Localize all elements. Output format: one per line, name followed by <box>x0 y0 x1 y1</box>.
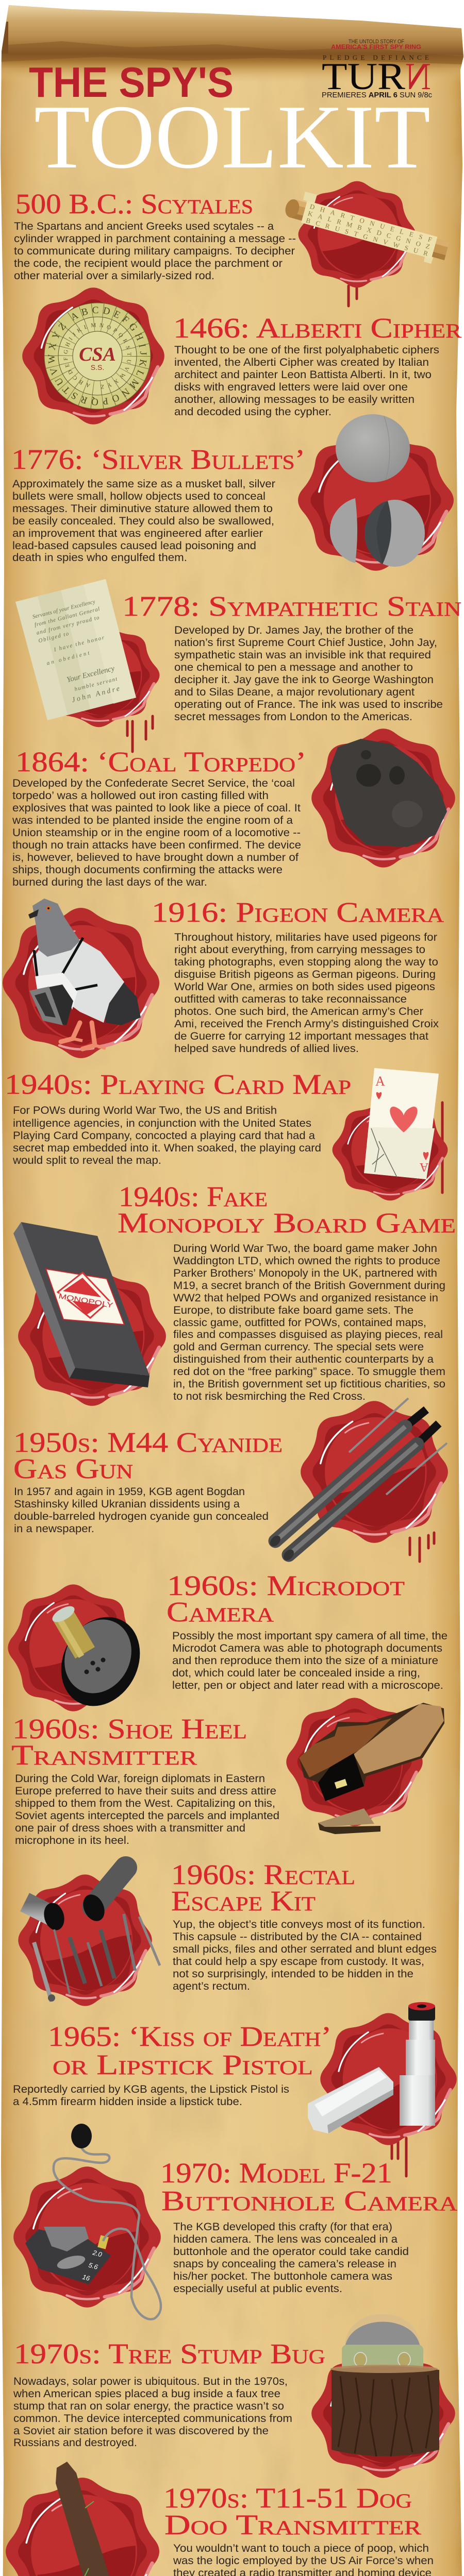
icon: wax seal with scytale rod: BCRUSTGNVWSUR <box>305 216 429 258</box>
text block: Buttonhole Camera description: especially useful at public events. <box>173 2283 342 2295</box>
text block: Tree Stump Bug description <box>13 2376 292 2449</box>
text block: Buttonhole Camera description: his/her pocket. The buttonhole camera was <box>173 2270 392 2282</box>
heading: 500 B.C. Scytales: 500 B.C.: Scytales <box>15 188 253 219</box>
text block: Pigeon Camera description: taking photographs, even stopping along the way to <box>174 956 438 968</box>
text block: Pigeon Camera description: disguise British pigeons as German pigeons. During <box>174 969 436 980</box>
text block: Rectal Escape Kit description: This capsule -- distributed by the CIA -- contained <box>173 1931 422 1943</box>
heading: 1960s Microdot Camera <box>167 1570 405 1628</box>
heading: 1970s T11-51 Dog Doo Transmitter: 1970s: T11-51 Dog <box>163 2482 412 2514</box>
text block: Buttonhole Camera description: hidden camera. The lens was concealed in a <box>173 2233 397 2245</box>
text block: Monopoly description: Waddington LTD, which owned the rights to produce <box>173 1255 440 1267</box>
icon: wax seal with scytale rod: DHARTONUELESF <box>309 202 433 244</box>
text block: Monopoly description: M19, a secret branch of the British Government during <box>173 1280 445 1292</box>
section: 1950s M44 Cyanide Gas Gun <box>13 1398 448 1562</box>
text block: Monopoly description: files and compasses disguised as playing pieces, real <box>173 1329 443 1341</box>
text block: Playing Card Map description: Playing Card Company, concocted a playing card that had a <box>13 1130 315 1142</box>
text block: Pigeon Camera description: photos. One such bird, the American army’s Cher <box>174 1006 423 1018</box>
text block: Sympathetic Stain description: Developed by Dr. James Jay, the brother of the <box>174 624 413 636</box>
text block: Pigeon Camera description: de Guerre for carrying 12 important messages that <box>174 1030 428 1042</box>
icon: wax seal with Monopoly box: MONOPOLY <box>58 1292 114 1310</box>
text block: Sympathetic Stain description: decipher it. Jay gave the ink to George Washington <box>174 674 434 686</box>
text block: Microdot description: Microdot Camera was able to photograph documents <box>172 1642 442 1654</box>
text block: Shoe Heel description: shipped to them from the West. Capitalizing on this, <box>15 1798 275 1809</box>
icon: wax seal with lipstick pistol <box>308 2002 457 2176</box>
icon: wax seal with folded letter <box>15 579 160 752</box>
heading: 1960s Shoe Heel Transmitter <box>11 1713 247 1771</box>
text block: Scytales description: The Spartans and ancient Greeks used scytales -- a <box>14 221 274 232</box>
text block: Rectal Escape Kit description: that could help a spy escape from custody. It was, <box>173 1956 424 1968</box>
text block: Pigeon Camera description: Ami, received the French Army’s distinguished Croix <box>174 1018 439 1030</box>
icon: wax seal with folded letter: Obliged to <box>38 631 70 644</box>
section: 1970s T11-51 Dog Doo Transmitter <box>6 2462 434 2576</box>
icon: wax seal with folded letter: an obedient <box>46 650 91 667</box>
section: 1965 Kiss of Death or Lipstick Pistol <box>13 2002 457 2176</box>
icon: wax seal with cipher disk: S.S. <box>91 363 104 371</box>
icon: wax seal with camera button <box>8 1584 155 1720</box>
icon: wax seal with coal lump <box>311 728 455 868</box>
icon: wax seal with Monopoly box <box>13 1222 166 1406</box>
text block: Sympathetic Stain description: secret messages from London to the Americas. <box>174 711 412 723</box>
text block: Monopoly description: Europe, to distribute fake board game sets. The <box>173 1304 413 1316</box>
text block: M44 description: double-barreled hydrogen cyanide gun concealed <box>14 1511 269 1522</box>
text block: Dog Doo description: You wouldn’t want to touch a piece of poop, which <box>173 2543 429 2554</box>
icon: wax seal with folded letter: and from very proud to <box>36 615 100 636</box>
text block: Coal Torpedo description: torpedo’ was a hollowed out iron casting filled with <box>12 790 269 802</box>
text block: Sympathetic Stain description: nation’s first Supreme Court Chief Justice, John Jay, <box>174 637 437 649</box>
text block: Alberti description: disks with engraved letters were laid over one <box>174 381 408 393</box>
heading: 1965 Kiss of Death: or Lipstick Pistol <box>53 2049 313 2080</box>
heading: 1950s M44 Cyanide Gas Gun: Gas Gun <box>13 1453 133 1484</box>
text block: Sympathetic Stain description: sympathetic stain was an invisible ink that required <box>174 649 431 661</box>
section: 1940s Fake Monopoly Board Game <box>13 1181 456 1406</box>
text block: Playing Card Map description: secret map embedded into it. When soaked, the playing card <box>13 1142 321 1154</box>
heading: 1776 Silver Bullets: 1776: ‘Silver Bullets’ <box>11 444 305 475</box>
text block: Playing Card Map description: For POWs during World War Two, the US and British <box>13 1105 277 1116</box>
section: 1940s Playing Card Map <box>5 1068 448 1200</box>
text block: Shoe Heel description: During the Cold War, foreign diplomats in Eastern <box>15 1773 265 1785</box>
text block: Buttonhole Camera description: snaps by concealing the camera’s release in <box>173 2258 396 2270</box>
icon: wax seal with buttonhole camera: 2.0 <box>91 2248 103 2259</box>
text block: Pigeon Camera description: helped save hundreds of allied lives. <box>174 1043 359 1055</box>
icon: wax seal with playing card: A <box>419 1160 428 1174</box>
text block: Shoe Heel description: microphone in its heel. <box>15 1835 129 1846</box>
heading: 1960s Shoe Heel Transmitter: 1960s: Shoe Heel <box>12 1713 247 1744</box>
text block: Coal Torpedo description: Developed by the Confederate Secret Service, the ‘coal <box>12 777 295 789</box>
section: 1916 Pigeon Camera <box>3 896 444 1058</box>
text block: M44 description: Stashinsky killed Ukranian dissidents using a <box>14 1498 240 1510</box>
text block: Pigeon Camera description <box>174 931 439 1055</box>
text block: Rectal Escape Kit description: agent’s rectum. <box>173 1980 250 1992</box>
text block: Alberti description: another, allowing messages to be easily written <box>174 394 415 405</box>
logo: Turn show promo: PREMIERES APRIL 6 SUN 9/8c <box>322 91 432 99</box>
text block: Playing Card Map description <box>12 1105 321 1166</box>
section: 1970s Tree Stump Bug <box>13 2314 455 2478</box>
heading: 1965 Kiss of Death <box>48 2021 332 2080</box>
text block: Playing Card Map description: would split to reveal the map. <box>12 1155 161 1166</box>
text block: Dog Doo description <box>173 2543 434 2576</box>
heading: 1960s Microdot Camera: Camera <box>167 1596 274 1628</box>
text block: Alberti description: invented, the Alberti Cipher was created by Italian <box>174 357 429 368</box>
heading: 1970s Tree Stump Bug: 1970s: Tree Stump Bug <box>14 2338 325 2369</box>
icon: wax seal with dog doo transmitter <box>6 2462 159 2576</box>
heading: 1970 Model F-21 Buttonhole Camera: Buttonhole Camera <box>161 2185 457 2216</box>
icon: wax seal with folded letter: from the Gallant General <box>34 606 101 628</box>
text block: M44 description: In 1957 and again in 1959, KGB agent Bogdan <box>14 1486 245 1498</box>
logo: Turn show promo: THE UNTOLD STORY OF <box>349 39 404 45</box>
text block: Silver Bullets description: death in spies who engulfed them. <box>12 552 187 564</box>
text block: Coal Torpedo description: ships, though documents confirming the attacks were <box>12 864 283 876</box>
text block: Silver Bullets description: messages. Their diminutive stature allowed them to <box>12 503 273 515</box>
text block: Pigeon Camera description: World War One, armies on both sides used pigeons <box>174 981 435 993</box>
icon: wax seal with playing card: A <box>375 1074 385 1089</box>
icon: wax seal with playing card <box>333 1068 448 1200</box>
section: 1960s Shoe Heel Transmitter <box>11 1698 444 1846</box>
text block: Monopoly description <box>173 1243 445 1402</box>
text block: Coal Torpedo description: was intended to be planted inside the engine room of a <box>12 815 293 826</box>
heading: 1965 Kiss of Death: 1965: ‘Kiss of Death’ <box>48 2021 332 2052</box>
text block: Rectal Escape Kit description: Yup, the object’s title conveys most of its function. <box>173 1919 425 1930</box>
text block: Coal Torpedo description: Union steamship or in the engine room of a locomotive -- <box>12 827 301 839</box>
heading: 1960s Shoe Heel Transmitter: Transmitter <box>11 1739 197 1771</box>
text block: Buttonhole Camera description: buttonhole and the operator could take candid <box>173 2246 409 2258</box>
text block: Tree Stump Bug description: when American spies placed a bug inside a faux tree <box>13 2388 280 2400</box>
text block: Playing Card Map description: intelligence agencies, in conjunction with the United States <box>13 1117 311 1129</box>
text block: Monopoly description: classic game, outfitted for POWs, contained maps, <box>173 1317 426 1329</box>
text block: Coal Torpedo description <box>12 777 301 888</box>
icon: wax seal with folded letter: John Andre <box>71 685 121 704</box>
text block: Silver Bullets description: bullets were small, hollow objects used to conceal <box>12 490 266 502</box>
text block: Shoe Heel description <box>15 1773 279 1846</box>
text block: Scytales description: other material over a similarly-sized rod. <box>14 270 214 282</box>
heading: 1960s Rectal Escape Kit: 1960s: Rectal <box>171 1859 355 1890</box>
section: 1970 Model F-21 Buttonhole Camera <box>13 2124 457 2319</box>
icon: wax seal with scytale rod <box>283 181 450 306</box>
icon: wax seal with folded letter: humble servant <box>74 676 118 692</box>
icon: wax seal with scytale rod: KALRMBXDCGNOZ <box>307 209 431 250</box>
heading: 1466 Alberti Cipher: 1466: Alberti Cipher <box>173 312 461 344</box>
text block: Monopoly description: to not risk besmirching the Red Cross. <box>173 1391 366 1402</box>
heading: 1940s Fake Monopoly Board Game: Monopoly Board Game <box>118 1207 456 1239</box>
text block: Coal Torpedo description: explosives that was painted to look like a piece of coal. It <box>12 802 301 814</box>
text block: Silver Bullets description: an improvement that was engineered after earlier <box>12 528 263 539</box>
heading: 1970 Model F-21 Buttonhole Camera <box>160 2157 457 2216</box>
heading: 1960s Rectal Escape Kit: Escape Kit <box>171 1885 316 1917</box>
text block: Silver Bullets description: lead-based capsules caused lead poisoning and <box>12 540 256 552</box>
icon: wax seal with folded letter: Your Excellency <box>66 665 115 684</box>
section: 1776 Silver Bullets <box>11 414 454 571</box>
title: The Spy's: THE SPY'S <box>29 58 234 106</box>
heading: 1916 Pigeon Camera: 1916: Pigeon Camera <box>152 896 444 928</box>
text block: Tree Stump Bug description: Russians and destroyed. <box>13 2437 137 2449</box>
logo: Turn show promo: AMERICA'S FIRST SPY RING <box>331 43 421 50</box>
text block: Silver Bullets description: be easily concealed. They could also be swallowed, <box>12 515 274 527</box>
section: 1778 Sympathetic Stain <box>15 579 461 752</box>
text block: Rectal Escape Kit description: not so surprisingly, intended to be hidden in the <box>173 1968 413 1980</box>
icon: wax seal with tree stump bug <box>311 2314 455 2478</box>
text block: Tree Stump Bug description: Nowadays, solar power is ubiquitous. But in the 1970s, <box>13 2376 288 2387</box>
logo: Turn show promo: TUR <box>322 56 406 98</box>
text block: Sympathetic Stain description: operating out of France. The ink was used to inscribe <box>174 699 443 710</box>
icon: wax seal with buttonhole camera: 5.6 <box>88 2261 99 2271</box>
heading: 1950s M44 Cyanide Gas Gun: 1950s: M44 Cyanide <box>13 1427 283 1458</box>
text block: Monopoly description: Parker Brothers’ Monopoly in the UK, partnered with <box>173 1267 437 1279</box>
text block: M44 description: in a newspaper. <box>14 1523 94 1535</box>
text block: Microdot description: dot, which could later be concealed inside a ring, <box>172 1667 420 1679</box>
text block: M44 description <box>14 1486 269 1535</box>
logo: Turn show promo <box>322 39 432 99</box>
text block: Coal Torpedo description: though no train attacks have been confirmed. The device <box>12 839 301 851</box>
heading: 1960s Microdot Camera: 1960s: Microdot <box>167 1570 405 1601</box>
icon: wax seal with gas gun <box>268 1398 448 1562</box>
heading: 1950s M44 Cyanide Gas Gun <box>13 1427 283 1484</box>
icon: wax seal with cipher disk: CSA <box>79 344 116 365</box>
heading: 1940s Fake Monopoly Board Game: 1940s: Fake <box>119 1181 268 1212</box>
section: 500 B.C. Scytales <box>14 181 450 306</box>
logo: Turn show promo: PLEDGE DEFIANCE <box>323 54 429 61</box>
heading: 1970s T11-51 Dog Doo Transmitter <box>163 2482 421 2540</box>
text block: Silver Bullets description: Approximately the same size as a musket ball, silver <box>12 478 275 490</box>
text block: Lipstick Pistol description: a 4.5mm firearm hidden inside a lipstick tube. <box>13 2096 242 2108</box>
icon: wax seal with folded letter: Servants of your Excellency <box>32 599 96 620</box>
text block: Monopoly description: distinguished from their authentic counterparts by a <box>173 1353 434 1365</box>
text block: Pigeon Camera description: right about everything, from carrying messages to <box>174 944 425 956</box>
text block: Microdot description: and then reproduce them into the size of a miniature <box>172 1655 438 1667</box>
heading: 1970 Model F-21 Buttonhole Camera: 1970: Model F-21 <box>160 2157 392 2189</box>
text block: Dog Doo description: was the logic employed by the US Air Force’s when <box>173 2555 434 2567</box>
text block: Shoe Heel description: one pair of dress shoes with a transmitter and <box>15 1822 245 1834</box>
icon: wax seal with pigeon and camera <box>3 899 159 1058</box>
text block: Alberti description: Thought to be one of the first polyalphabetic ciphers <box>174 344 439 356</box>
title: Toolkit: TOOLKIT <box>34 87 430 188</box>
text block: Scytales description <box>14 221 296 282</box>
text block: Tree Stump Bug description: stump that ran on solar energy, the practice wasn’t so <box>13 2400 284 2412</box>
heading: 1960s Rectal Escape Kit <box>171 1859 355 1917</box>
text block: Monopoly description: gold and German currency. The special sets were <box>173 1341 424 1353</box>
heading: 1864 Coal Torpedo: 1864: ‘Coal Torpedo’ <box>15 746 306 777</box>
text block: Shoe Heel description: Soviet agents intercepted the parcels and implanted <box>15 1810 279 1822</box>
icon: wax seal with escape kit <box>18 1868 160 2006</box>
section: 1960s Microdot Camera <box>8 1570 448 1720</box>
icon: wax seal with buttonhole camera <box>13 2124 161 2319</box>
text block: Buttonhole Camera description <box>173 2221 409 2295</box>
icon: wax seal with silver bullets <box>298 414 454 571</box>
text block: Alberti description: and decoded using the cypher. <box>174 406 332 418</box>
text block: Monopoly description: red dot on the “free parking” space. To smuggle them <box>173 1366 445 1378</box>
icon: wax seal with cipher disk: ABCDEFGHIJKLMNOPQRSTUVWXYZ <box>64 323 131 389</box>
text block: Monopoly description: During World War Two, the board game maker John <box>173 1243 437 1255</box>
section: 1466 Alberti Cipher <box>22 287 462 425</box>
text block: Scytales description: to communicate during military campaigns. To decipher <box>14 245 295 257</box>
heading: 1778 Sympathetic Stain: 1778: Sympathetic Stain <box>122 590 461 622</box>
text block: Microdot description <box>172 1630 448 1691</box>
text block: Tree Stump Bug description: a Soviet air station before it was discovered by the <box>13 2425 269 2437</box>
heading: 1940s Playing Card Map: 1940s: Playing Card Map <box>5 1069 351 1100</box>
text block: Coal Torpedo description: is, however, believed to have brought down a number of <box>12 852 299 863</box>
text block: Rectal Escape Kit description: small picks, files and other serrated and blunt edges <box>173 1943 437 1955</box>
heading: 1940s Fake Monopoly Board Game <box>118 1181 456 1239</box>
text block: Shoe Heel description: Europe preferred to have their suits and dress attire <box>15 1785 276 1797</box>
text block: Microdot description: letter, pen or object and later read with a microscope. <box>172 1680 443 1691</box>
text block: Sympathetic Stain description: one chemical to pen a message and another to <box>174 662 413 673</box>
text block: Alberti description <box>174 344 439 418</box>
text block: Sympathetic Stain description: and to Silas Deane, a major revolutionary agent <box>174 686 415 698</box>
icon: wax seal with folded letter: I have the honor <box>53 634 105 653</box>
logo: Turn show promo: N <box>405 56 431 98</box>
text block: Rectal Escape Kit description <box>173 1919 437 1992</box>
icon: wax seal with buttonhole camera: 16 <box>81 2273 91 2282</box>
text block: Monopoly description: WW2 that helped POWs and organized resistance in <box>173 1292 438 1304</box>
text block: Sympathetic Stain description <box>174 624 443 723</box>
text block: Coal Torpedo description: burned during the last days of the war. <box>12 876 207 888</box>
section: 1864 Coal Torpedo <box>12 728 455 888</box>
icon: wax seal with cipher disk <box>22 287 164 425</box>
text block: Buttonhole Camera description: The KGB developed this crafty (for that era) <box>173 2221 392 2233</box>
text block: Scytales description: cylinder wrapped in parchment containing a message -- <box>14 233 296 245</box>
text block: Silver Bullets description <box>12 478 275 564</box>
text block: Lipstick Pistol description <box>13 2083 289 2108</box>
text block: Lipstick Pistol description: Reportedly carried by KGB agents, the Lipstick Pistol is <box>13 2083 289 2095</box>
text block: Pigeon Camera description: Throughout history, militaries have used pigeons for <box>174 931 437 943</box>
section: 1960s Rectal Escape Kit <box>18 1859 437 2006</box>
text block: Monopoly description: in, the British government set up fictitious charities, so <box>173 1378 445 1390</box>
icon: wax seal with cipher disk: ABCDEFGHIJKLMNOPQRSTUVWXYZ <box>48 307 147 405</box>
icon: wax seal with shoe and transmitter <box>286 1698 444 1834</box>
text block: Scytales description: the code, the recipient would place the parchment or <box>14 258 283 269</box>
text block: Pigeon Camera description: outfitted with cameras to take reconnaissance <box>174 993 407 1005</box>
text block: Alberti description: architect and painter Leon Battista Alberti. In it, two <box>174 369 432 381</box>
heading: 1970s T11-51 Dog Doo Transmitter: Doo Transmitter <box>164 2509 421 2540</box>
text block: Tree Stump Bug description: common. The device intercepted communications from <box>13 2413 292 2425</box>
text block: Microdot description: Possibly the most important spy camera of all time, the <box>172 1630 448 1642</box>
